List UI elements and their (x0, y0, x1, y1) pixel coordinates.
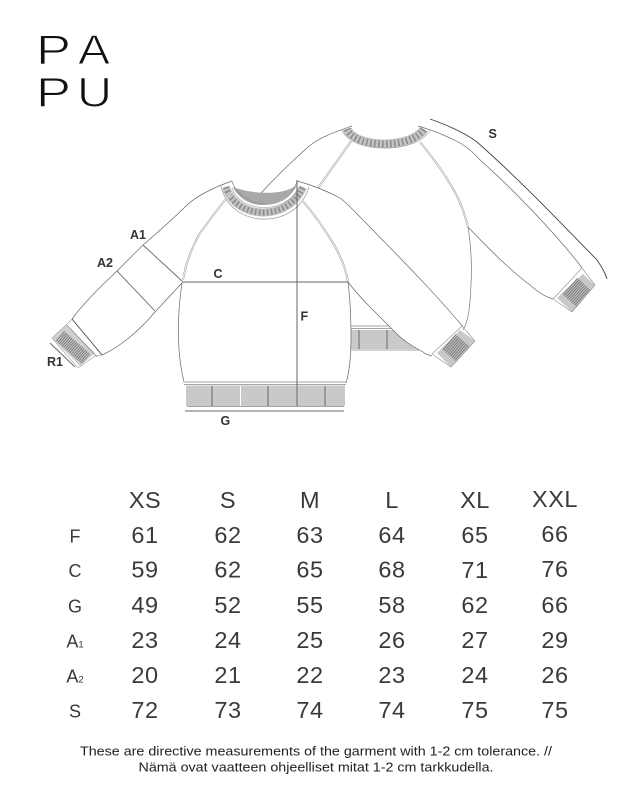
row A1: 23 (131, 627, 159, 653)
left front cuff (52, 319, 102, 368)
row A2: 20 (131, 662, 159, 688)
row G: 58 (378, 592, 406, 618)
line G (185, 410, 344, 412)
row S: 73 (214, 697, 242, 723)
logo: PAPU: A (78, 26, 110, 73)
row C: 65 (296, 556, 324, 582)
row S (69, 697, 569, 723)
collar interior crescent (233, 185, 297, 205)
row F (70, 521, 569, 548)
row A2: 24 (461, 662, 489, 688)
row S: 75 (461, 697, 489, 723)
logo: PAPU: U (77, 68, 112, 116)
row G (68, 592, 569, 618)
row F: 61 (131, 522, 159, 548)
front hem rib (184, 382, 346, 406)
row A2: 23 (378, 662, 406, 688)
row C: 71 (461, 557, 489, 583)
row S: 75 (541, 697, 569, 723)
front sleeve right outline (297, 181, 463, 356)
front raglan seams (183, 192, 348, 282)
row F: 62 (214, 522, 242, 548)
measurement letters: A1 (130, 228, 146, 242)
technical drawing: sweatshirt front (52, 181, 475, 406)
header row: L (385, 487, 399, 513)
line A1 (143, 245, 182, 281)
line C (182, 281, 348, 283)
row A1 (66, 627, 569, 653)
row A1: 27 (461, 627, 489, 653)
line R1 (50, 343, 75, 367)
row A1: 29 (541, 627, 569, 653)
back hem (351, 326, 420, 350)
logo: PAPU: P (36, 26, 71, 73)
header row: S (220, 487, 236, 513)
row G: 55 (296, 592, 324, 618)
measurement letters: F (300, 310, 308, 324)
row A1: A1 (66, 632, 84, 652)
header row: M (300, 487, 320, 513)
line F (296, 180, 298, 406)
row G: 49 (131, 592, 159, 618)
row C: 76 (541, 556, 569, 582)
header row (129, 486, 578, 513)
measurement letters (47, 127, 497, 428)
row C: 59 (131, 556, 159, 582)
footnote: Nämä ovat vaatteen ohjeelliset mitat 1-2 cm tarkkudella. (138, 760, 494, 774)
logo: PAPU (36, 26, 112, 116)
footnote (80, 744, 553, 774)
row A1: 24 (214, 627, 242, 653)
logo: PAPU: P (36, 68, 71, 116)
measurement lines (50, 180, 348, 411)
back sleeves outline (260, 126, 582, 299)
row C: 68 (378, 556, 406, 582)
header row: XS (129, 487, 161, 513)
measurement letters: R1 (47, 355, 63, 369)
front collar rib (221, 181, 309, 219)
row A1: 26 (378, 627, 406, 653)
row F: 63 (296, 522, 324, 548)
right front cuff (432, 326, 475, 367)
size table (66, 486, 578, 723)
row S: 72 (131, 697, 159, 723)
row C: C (68, 561, 82, 581)
row F: F (70, 526, 80, 546)
measurement letters: A2 (97, 256, 113, 270)
row G: 52 (214, 592, 242, 618)
S measurement line (430, 119, 607, 279)
back collar (342, 129, 430, 148)
row A2: 21 (214, 662, 242, 688)
back cuff (553, 268, 595, 312)
footnote: These are directive measurements of the garment with 1-2 cm tolerance. // (80, 744, 553, 758)
row S: 74 (378, 697, 406, 723)
row C (68, 556, 569, 583)
row A2: 22 (296, 662, 324, 688)
row F: 65 (461, 522, 489, 548)
row G: 66 (541, 592, 569, 618)
front body fill (72, 181, 351, 383)
header row: XXL (532, 486, 578, 512)
row G: G (68, 596, 82, 616)
measurement letters: S (488, 127, 497, 141)
row F: 64 (378, 522, 406, 548)
front outline (72, 181, 351, 383)
row A2 (66, 662, 569, 688)
technical drawing: sweatshirt back (260, 126, 595, 350)
front sleeve right (297, 181, 463, 356)
row C: 62 (214, 556, 242, 582)
seam over cuff left (72, 319, 102, 355)
measurement letters: G (220, 414, 230, 428)
line A2 (117, 271, 155, 311)
header row: XL (460, 487, 490, 513)
row S: S (69, 702, 81, 722)
row S: 74 (296, 697, 324, 723)
measurement letters: C (214, 267, 223, 281)
row G: 62 (461, 592, 489, 618)
row A2: A2 (66, 666, 84, 686)
row F: 66 (541, 521, 569, 547)
row A2: 26 (541, 662, 569, 688)
back raglan seams (318, 140, 471, 330)
row A1: 25 (296, 627, 324, 653)
